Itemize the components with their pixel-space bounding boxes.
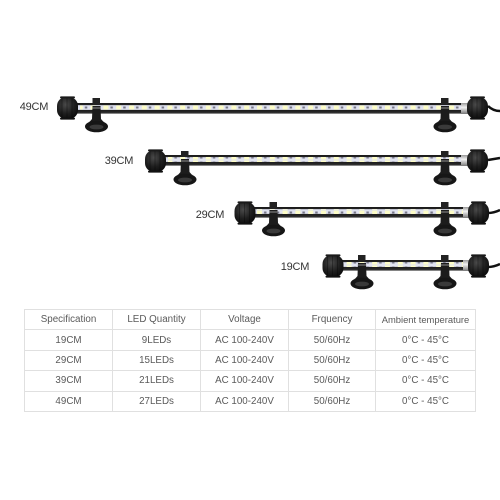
- specification table: 39CM: [55, 375, 82, 386]
- specification table: LED Quantity: [127, 314, 186, 325]
- specification table: 0°C - 45°C: [402, 375, 449, 386]
- lamp: 29CM: [234, 201, 500, 236]
- specification table: 50/60Hz: [314, 396, 350, 407]
- specification table: Ambient temperature: [382, 314, 469, 325]
- specification table: 50/60Hz: [314, 375, 350, 386]
- specification table: Frquency: [312, 314, 352, 325]
- specification table: AC 100-240V: [215, 396, 274, 407]
- specification table: AC 100-240V: [215, 355, 274, 366]
- lamp: 19CM: [322, 254, 500, 289]
- lamp: 49CM: [57, 96, 500, 132]
- specification table: Specification: [41, 314, 96, 325]
- specification table: AC 100-240V: [215, 335, 274, 346]
- specification table: AC 100-240V: [215, 375, 274, 386]
- specification table: [24, 309, 476, 412]
- specification table: Voltage: [228, 314, 261, 325]
- lamp: 39CM: [145, 149, 500, 185]
- specification table: 0°C - 45°C: [402, 396, 449, 407]
- specification table: 49CM: [55, 396, 82, 407]
- specification table: 27LEDs: [139, 396, 174, 407]
- specification table: 29CM: [55, 355, 82, 366]
- specification table: 50/60Hz: [314, 335, 350, 346]
- specification table: 0°C - 45°C: [402, 355, 449, 366]
- specification table: 15LEDs: [139, 355, 174, 366]
- label: 19CM: 19CM: [281, 261, 309, 273]
- label: 29CM: 29CM: [196, 209, 224, 221]
- label: 49CM: 49CM: [20, 101, 48, 113]
- specification table: 21LEDs: [139, 375, 174, 386]
- specification table: 0°C - 45°C: [402, 335, 449, 346]
- specification table: 9LEDs: [142, 335, 171, 346]
- specification table: 50/60Hz: [314, 355, 350, 366]
- specification table: 19CM: [55, 335, 82, 346]
- label: 39CM: 39CM: [105, 155, 133, 167]
